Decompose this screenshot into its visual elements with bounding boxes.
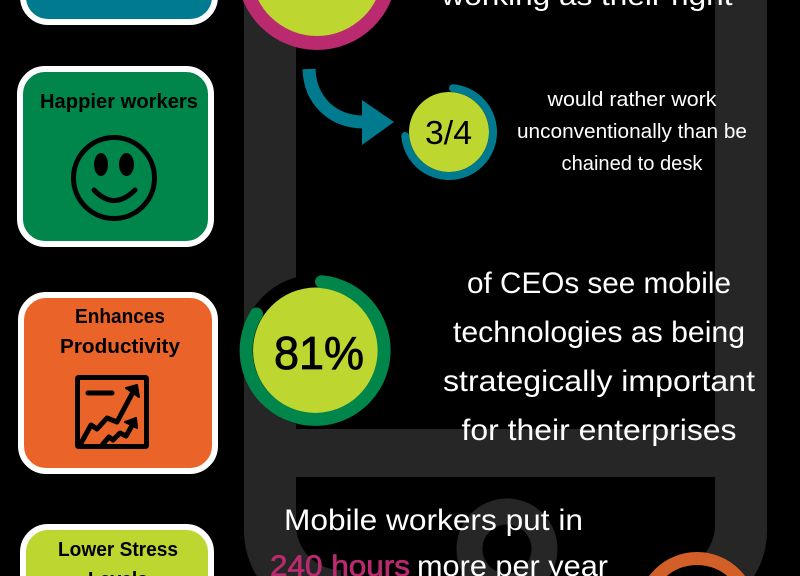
card heading: lower stress levels: Lower Stress [58,539,178,561]
phone outline background [244,0,767,576]
stat circle: 81% [240,274,392,426]
stat circle: 81%: 81% [274,327,364,379]
card heading: enhances productivity: Productivity [60,336,181,358]
text: mobile workers put in 240 hours: Mobile workers put in [284,504,583,537]
text: would rather work unconventionally: unconventionally than be [517,121,747,143]
stat circle: 3/4 [405,88,493,176]
text: CEOs mobile technologies: for their enterprises [462,414,736,447]
text: CEOs mobile technologies: strategically important [443,365,756,398]
stat circle: 3/4: 3/4 [425,114,472,151]
card heading: happier workers: Happier workers [40,91,198,113]
arrow: teal curved arrow [309,69,394,145]
text: would rather work unconventionally: would rather work [546,89,718,111]
text: mobile workers put in 240 hours [270,504,608,576]
card: enhances productivity [21,295,215,471]
card: happier workers [20,69,211,244]
text: CEOs mobile technologies: technologies as being [453,316,745,349]
card: teal (cropped at top) [23,0,215,22]
icon: smiley face [74,138,154,218]
card heading: enhances productivity: Enhances [75,306,165,328]
text: CEOs mobile technologies: of CEOs see mobile [467,267,731,300]
card: lower stress levels [23,527,211,576]
stat circle: top magenta ring [244,0,390,43]
text: would rather work unconventionally: chained to desk [562,153,703,175]
icon: growth chart [78,378,146,446]
stat circle: orange ring (cropped at bottom) [644,558,750,576]
